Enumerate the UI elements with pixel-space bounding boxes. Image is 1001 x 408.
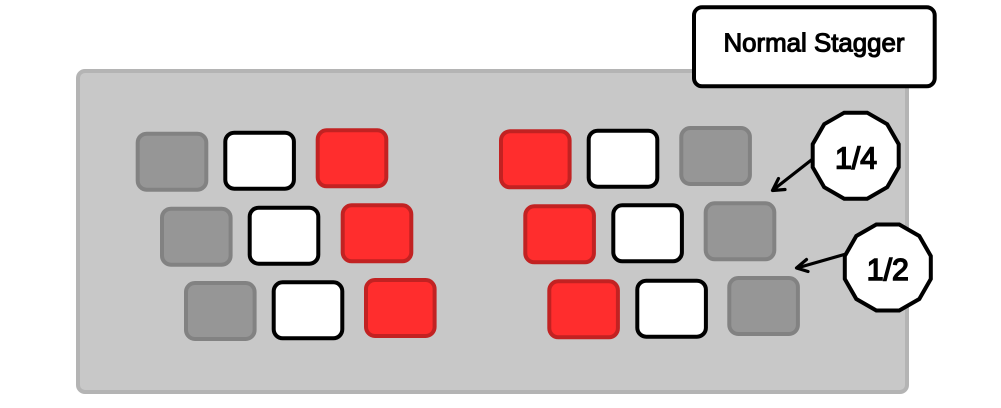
callout label: 1/4: 1/4 bbox=[835, 140, 877, 176]
key: left row 1 white bbox=[225, 133, 294, 189]
key: right row 1 gray bbox=[681, 128, 750, 184]
key: right row 3 white bbox=[637, 281, 706, 337]
key: right row 1 white bbox=[589, 131, 657, 187]
key: right row 1 red bbox=[501, 131, 570, 187]
left hand keys bbox=[138, 130, 435, 339]
key: left row 2 red bbox=[343, 205, 411, 261]
key: right row 2 white bbox=[613, 205, 682, 261]
title: Normal Stagger bbox=[724, 28, 905, 58]
key: right row 2 gray bbox=[706, 203, 774, 259]
arrow: 1/4 callout to row offset bbox=[772, 160, 812, 190]
callout label: 1/2: 1/2 bbox=[867, 252, 909, 287]
arrow: 1/2 callout to row offset bbox=[796, 254, 846, 272]
key: left row 2 gray bbox=[162, 209, 231, 265]
key: left row 2 white bbox=[250, 208, 318, 264]
right hand keys bbox=[501, 128, 798, 337]
key: left row 1 red bbox=[318, 130, 386, 186]
key: left row 1 gray bbox=[138, 134, 206, 190]
panel: keyboard background bbox=[78, 71, 907, 392]
key: right row 3 gray bbox=[729, 278, 798, 334]
key: right row 2 red bbox=[525, 206, 594, 262]
key: left row 3 red bbox=[366, 280, 435, 336]
callout: 1/4 bbox=[813, 113, 899, 199]
callout: 1/2 bbox=[845, 224, 931, 310]
key: left row 3 white bbox=[274, 282, 342, 338]
key: right row 3 red bbox=[549, 281, 618, 337]
title box bbox=[694, 7, 935, 86]
key: left row 3 gray bbox=[186, 283, 255, 339]
